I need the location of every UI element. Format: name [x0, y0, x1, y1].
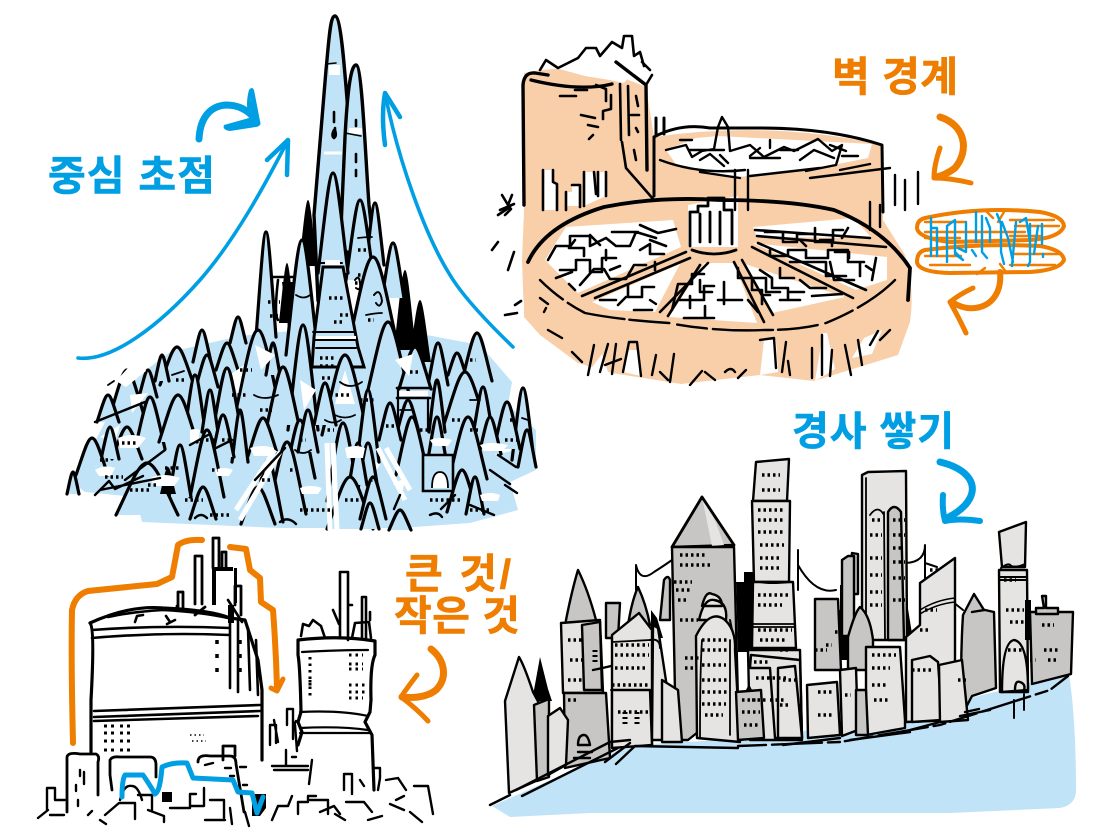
background black towers and wires	[532, 545, 963, 701]
orange outline over large form	[72, 540, 283, 743]
label line one: 큰 것/	[405, 551, 511, 597]
white rooftop clusters	[548, 40, 872, 177]
label: stacking the slope: 경사 쌓기	[792, 410, 954, 454]
blue city strokes	[931, 212, 1043, 266]
orange wall bands	[917, 210, 1064, 274]
black background spires	[279, 200, 431, 362]
illustration: stepped skyline (stacking the slope)	[490, 459, 1076, 817]
flat roof bridge building	[397, 388, 430, 428]
blue detail line over small forms	[122, 763, 263, 813]
white highlight patches	[95, 355, 508, 501]
arrow: long blue arrow rising right	[383, 93, 513, 347]
tall tower two	[862, 471, 907, 640]
chimneys of large cylinder	[177, 538, 241, 615]
illustration: walled city (wall boundary)	[492, 36, 918, 385]
arrow: long blue arrow rising left	[78, 140, 288, 358]
illustration: big and small forms	[38, 538, 433, 826]
tower outline and details	[523, 62, 647, 205]
tall tower one	[748, 459, 802, 740]
small cylinder	[298, 572, 375, 790]
low front buildings	[38, 746, 266, 826]
tall central spires	[314, 16, 375, 300]
deco domed building	[696, 593, 740, 742]
diagram: wall bands with city strokes	[917, 210, 1064, 333]
wheel spokes	[582, 230, 886, 322]
small annex between cylinders	[270, 709, 312, 784]
right towers	[961, 522, 1073, 715]
arrow: curved blue arrow to spire	[199, 88, 260, 139]
avenue strokes	[236, 443, 410, 530]
tower with pyramid roof	[672, 497, 738, 740]
windows and street scribble	[100, 360, 518, 515]
arched building	[848, 607, 873, 670]
arrow: orange arrow from big and small label	[401, 649, 443, 721]
tower cluster spires	[235, 173, 409, 430]
skyline windows	[568, 475, 1060, 758]
label: central focus: 중심 초점	[48, 153, 215, 199]
white gaps between spires	[100, 345, 515, 477]
shoreline	[490, 676, 1068, 805]
right low scribble	[272, 768, 433, 822]
peaked building	[612, 613, 682, 745]
far mid-grey towers	[565, 553, 858, 640]
back row spires	[97, 317, 492, 435]
wheel rim outline	[528, 199, 910, 300]
peach wall fill	[522, 69, 912, 384]
label: wall boundary: 벽 경계	[832, 54, 958, 100]
water	[492, 674, 1076, 817]
large cylinder	[90, 567, 262, 760]
illustration: spire city (central focus)	[67, 16, 536, 530]
orange arrow below bands	[950, 272, 1000, 333]
arrow: orange arrow from wall label	[934, 117, 971, 183]
front gatehouse	[423, 455, 453, 491]
front row spires	[67, 410, 487, 530]
arrow: blue arrow from slope label	[940, 462, 980, 521]
label: big and small	[394, 551, 520, 639]
mid tower	[815, 599, 841, 670]
white lower skyline cut-outs	[498, 161, 895, 381]
wall base scribble	[540, 298, 890, 385]
slanted building	[906, 558, 955, 722]
label line two: 작은 것	[394, 593, 520, 639]
spire city base colour	[72, 330, 536, 528]
wheel hub	[690, 198, 736, 254]
middle cylinder outline and details	[654, 118, 883, 212]
middle row spires	[135, 367, 536, 467]
white sectors of the wheel	[545, 196, 887, 323]
spired tower and left buildings	[505, 620, 610, 793]
wheel rooftop linework	[548, 225, 876, 318]
front light buildings	[612, 647, 968, 748]
